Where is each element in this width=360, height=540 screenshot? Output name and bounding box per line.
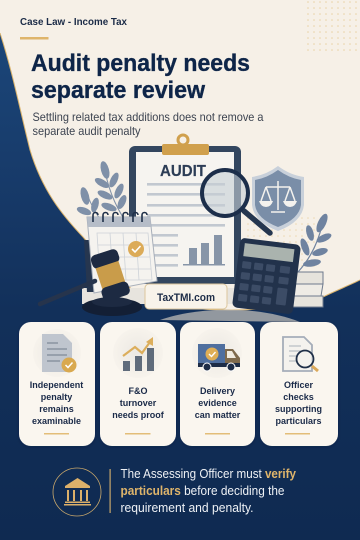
icon: calendar [84, 212, 157, 293]
title [31, 50, 250, 104]
card text: evidence [198, 398, 237, 408]
conclusion text: particulars before deciding the [120, 484, 284, 498]
card text: supporting [275, 404, 322, 414]
icon: shield with scales [252, 166, 304, 231]
website badge: TaxTMI.com [157, 292, 215, 304]
panel: turnover proof [100, 322, 176, 446]
icon: document with magnifier [283, 337, 318, 371]
icon: gavel [40, 248, 142, 316]
icon: books [289, 272, 323, 307]
icon: right plant [298, 212, 333, 272]
conclusion text [120, 467, 296, 515]
icon: delivery truck [192, 328, 242, 378]
card text: turnover [120, 398, 157, 408]
subtitle: separate audit penalty [32, 124, 140, 138]
divider [110, 469, 111, 513]
card text: F&O [128, 386, 148, 396]
card text: Officer [284, 380, 313, 390]
card text [195, 386, 241, 420]
icon: desk book [82, 288, 237, 304]
card text: remains [39, 404, 74, 414]
icon: calculator [232, 238, 301, 315]
card text: needs proof [112, 410, 165, 420]
title: separate review [31, 77, 206, 104]
panel: delivery evidence [180, 322, 255, 446]
card text: particulars [275, 416, 322, 426]
card text [112, 386, 165, 420]
website badge [145, 284, 227, 309]
icon: left plant [76, 160, 128, 222]
icon: rising bar chart [113, 328, 163, 378]
card text: examinable [32, 416, 81, 426]
card text: penalty [41, 392, 72, 402]
card text: can matter [195, 410, 241, 420]
card text: Independent [30, 380, 83, 390]
conclusion text: requirement and penalty. [120, 501, 254, 515]
icon: clipboard [129, 135, 241, 284]
title: Audit penalty needs [31, 50, 250, 77]
card text: checks [283, 392, 314, 402]
subtitle: Settling related tax additions does not remove a [32, 110, 264, 124]
accent rule [20, 37, 48, 40]
conclusion text: The Assessing Officer must verify [120, 467, 296, 481]
card text: Delivery [200, 386, 235, 396]
card text [275, 380, 322, 426]
document heading: AUDIT [160, 163, 207, 180]
icon: courthouse [53, 468, 101, 516]
category label: Case Law - Income Tax [20, 17, 127, 28]
subtitle [32, 110, 264, 138]
icon: document with check [33, 329, 81, 377]
illustration: audit desk scene [40, 135, 333, 316]
panel: officer checks [260, 322, 338, 446]
icon: magnifying glass [202, 170, 270, 233]
card text [30, 380, 83, 426]
panel: independent penalty [19, 322, 95, 446]
